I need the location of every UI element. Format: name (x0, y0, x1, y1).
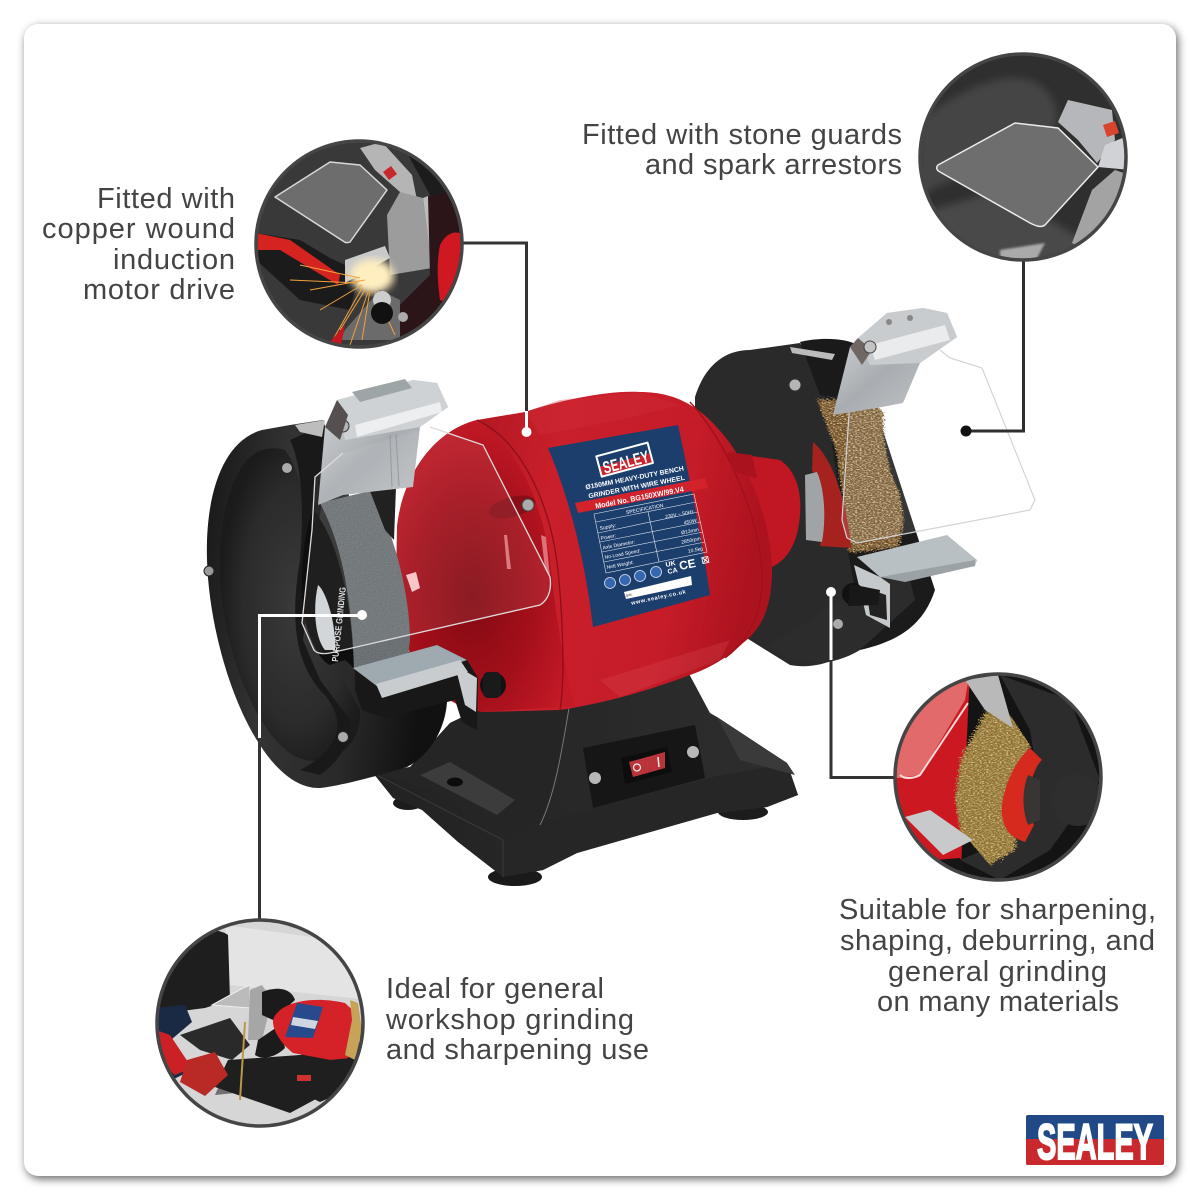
plate text: Ø150MM HEAVY-DUTY BENCH (585, 466, 685, 492)
connector: lower left callout (260, 610, 367, 920)
right wheel cover (695, 339, 915, 666)
detail circle: sparks at grinding wheel (250, 135, 470, 355)
text: suitable applications: general grinding (888, 956, 1107, 988)
product label plate (548, 425, 710, 627)
detail circle: workshop use (150, 910, 370, 1130)
power switch (583, 725, 705, 808)
red motor body (396, 392, 772, 712)
specification text: 230V ~ 50Hz (665, 509, 695, 521)
wheel label disc: PURPOSE GRINDING (330, 587, 348, 662)
specification text (599, 503, 704, 571)
certification marks: CA (667, 567, 678, 576)
base casting (373, 670, 798, 886)
specification text: SPECIFICATION (626, 503, 664, 516)
text: workshop use (385, 973, 649, 1066)
right tool rest and knob (833, 535, 977, 629)
brass wire wheel (817, 398, 904, 552)
specification text: Axle Diameter: (602, 539, 636, 551)
serial number label: S/N: (625, 593, 633, 598)
wheel label disc (302, 510, 354, 668)
specification text: 2850rpm (681, 536, 701, 546)
product: bench grinder (204, 308, 1035, 886)
motor shaft boss (745, 455, 800, 567)
plate text: Model No. BG150XW/99.V4 (594, 484, 685, 511)
text: stone guards (582, 119, 902, 181)
website: www.sealey.co.uk (630, 589, 687, 607)
text: stone guards: and spark arrestors (645, 149, 902, 181)
rear right guard disc (800, 340, 935, 660)
specification text: No-Load Speed: (604, 548, 641, 561)
specification text: 450W (683, 518, 698, 526)
certification marks: ☒ (700, 555, 710, 566)
left tool rest (353, 645, 506, 730)
text: suitable applications: on many materials (877, 986, 1119, 1018)
right clear spark guard (842, 350, 1035, 543)
text: workshop use: and sharpening use (386, 1034, 649, 1066)
specification text: Nett Weight: (606, 560, 634, 571)
detail circle: brass wire wheel (890, 670, 1110, 890)
text: suitable applications: Suitable for sharpening, (839, 894, 1156, 926)
right guard bracket (833, 308, 957, 415)
safety icons (604, 566, 662, 588)
serial number field (624, 576, 692, 599)
text: copper wound motor (42, 183, 235, 306)
plate text (585, 466, 685, 511)
specification text: Power: (600, 533, 617, 542)
text: workshop use: workshop grinding (385, 1004, 634, 1036)
specification text: Ø13mm (681, 527, 699, 536)
certification marks: CE (678, 556, 697, 573)
text: copper wound motor: induction (113, 244, 235, 276)
text: suitable applications: shaping, deburring, and (840, 925, 1155, 957)
left guard bracket (318, 379, 448, 540)
text: copper wound motor: Fitted with (97, 183, 235, 215)
detail circle: clear stone guard (915, 50, 1135, 270)
specification text: 10.5kg (687, 546, 704, 555)
left clear spark guard (302, 427, 551, 654)
text: copper wound motor: motor drive (83, 274, 235, 306)
specification table (594, 494, 707, 573)
text: suitable applications (839, 894, 1156, 1018)
connector: top left callout (462, 243, 532, 437)
text: workshop use: Ideal for general (386, 973, 604, 1005)
specification text: Supply: (599, 523, 617, 532)
connector: top right callout (960, 260, 1024, 436)
grinding stone (320, 491, 410, 668)
certification marks: UK (665, 560, 676, 569)
certification marks (665, 555, 710, 576)
left wheel cover (204, 420, 447, 788)
red flange and washer (805, 442, 851, 548)
plate logo: SEALEY (601, 447, 651, 478)
text: stone guards: Fitted with stone guards (582, 119, 902, 151)
plate logo (595, 441, 654, 479)
connector: lower right callout (826, 587, 896, 778)
text: copper wound motor: copper wound (42, 213, 235, 245)
plate text: GRINDER WITH WIRE WHEEL (588, 475, 685, 500)
